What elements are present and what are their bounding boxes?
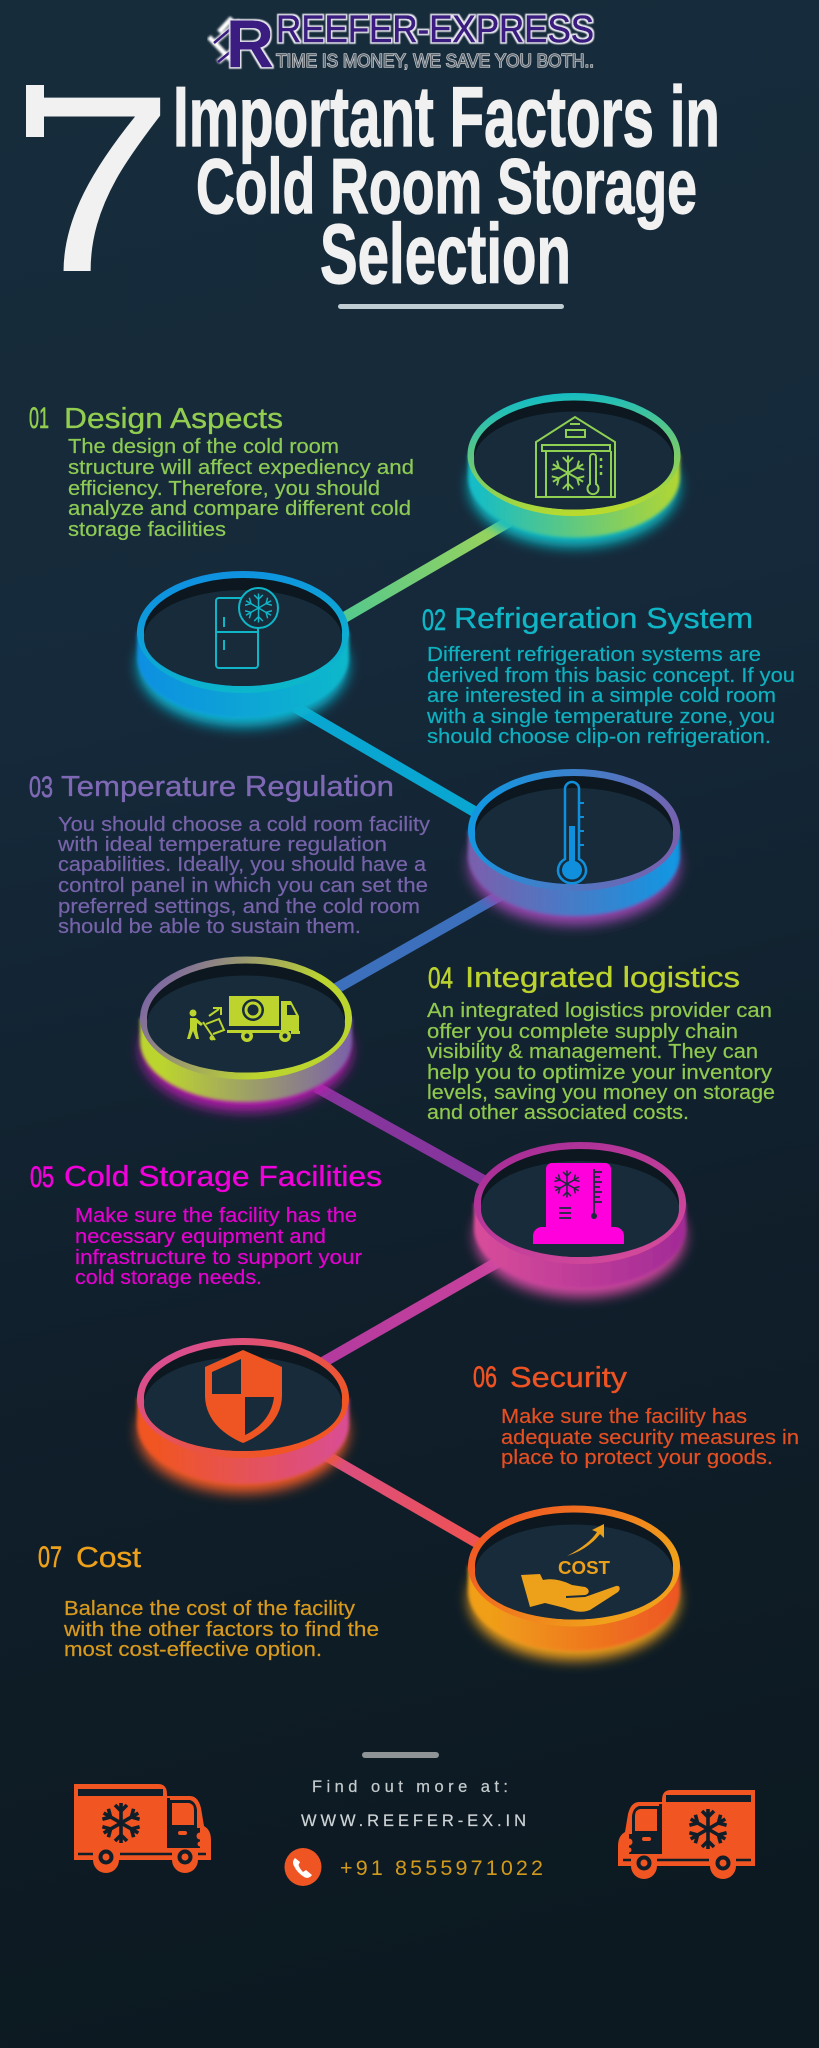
footer truck right <box>618 1790 755 1879</box>
title text <box>173 70 720 301</box>
icon: fridge <box>216 588 278 668</box>
body 02: Different refrigeration systems are <box>427 644 761 666</box>
body 04: and other associated costs. <box>427 1102 689 1124</box>
heading 01: 01 <box>29 402 49 435</box>
icon: cost hand: COST <box>558 1558 610 1578</box>
body 03: capabilities. Ideally, you should have a <box>58 854 427 876</box>
connector: 5 to 6 <box>320 1259 503 1364</box>
heading 05: Cold Storage Facilities <box>64 1161 382 1193</box>
body 01: analyze and compare different cold <box>68 498 411 520</box>
body 06: adequate security measures in <box>501 1427 799 1449</box>
body 07 <box>63 1598 379 1661</box>
body 01: storage facilities <box>68 519 226 541</box>
title <box>11 44 720 325</box>
icon: delivery truck with hand cart <box>187 996 300 1042</box>
body 03: control panel in which you can set the <box>58 875 428 897</box>
body 04: An integrated logistics provider can <box>427 1000 772 1022</box>
factor 01 text <box>29 402 414 541</box>
icon: cost hand <box>521 1524 620 1612</box>
body 03: with ideal temperature regulation <box>57 834 387 856</box>
heading 02: 02 <box>422 604 446 637</box>
body 03: preferred settings, and the cold room <box>58 896 420 918</box>
title text: Selection <box>320 207 571 301</box>
body 04: help you to optimize your inventory <box>427 1062 772 1084</box>
body 02: should choose clip-on refrigeration. <box>427 726 771 748</box>
disk 3: temperature regulation <box>468 769 680 925</box>
factor 02 text <box>422 603 795 748</box>
find out more text: Find out more at: <box>312 1778 508 1796</box>
body 02 <box>426 644 795 748</box>
body 05: necessary equipment and <box>75 1226 326 1248</box>
factor 07 text <box>38 1541 379 1661</box>
body 03: You should choose a cold room facility <box>58 814 430 836</box>
disk 4: integrated logistics <box>140 956 352 1111</box>
body 06: place to protect your goods. <box>501 1447 773 1469</box>
factor 03 text <box>29 771 430 938</box>
body 04: offer you complete supply chain <box>427 1021 738 1043</box>
connector: 1 to 2 <box>340 521 510 620</box>
heading 06: Security <box>510 1362 628 1394</box>
heading 03: Temperature Regulation <box>61 771 394 803</box>
heading 07: Cost <box>76 1542 141 1574</box>
heading 06 <box>473 1361 628 1394</box>
body 07: with the other factors to find the <box>63 1619 379 1641</box>
body 03: should be able to sustain them. <box>58 916 361 938</box>
body 01: efficiency. Therefore, you should <box>68 478 380 500</box>
logo tagline: TIME IS MONEY, WE SAVE YOU BOTH.. <box>276 51 594 71</box>
connector: 3 to 4 <box>330 892 506 992</box>
body 06: Make sure the facility has <box>501 1406 747 1428</box>
phone number: +91 8555971022 <box>340 1856 543 1880</box>
website: WWW.REEFER-EX.IN <box>301 1812 526 1830</box>
body 02: with a single temperature zone, you <box>426 706 775 728</box>
heading 03: 03 <box>29 771 53 804</box>
body 07: Balance the cost of the facility <box>64 1598 355 1620</box>
heading 01: Design Aspects <box>64 403 283 435</box>
heading 07: 07 <box>38 1541 62 1574</box>
heading 07 <box>38 1541 141 1574</box>
factor 06 text <box>473 1361 799 1469</box>
disk 7: cost <box>468 1506 680 1660</box>
icon: phone <box>284 1848 322 1886</box>
heading 02: Refrigeration System <box>454 603 753 635</box>
logo wordmark: REEFER-EXPRESS <box>276 9 594 51</box>
disk 1: design aspects <box>468 393 680 547</box>
body 01: The design of the cold room <box>68 436 339 458</box>
heading 05: 05 <box>30 1161 54 1194</box>
body 03 <box>57 814 430 938</box>
body 05: infrastructure to support your <box>75 1247 362 1269</box>
heading 04: Integrated logistics <box>465 962 740 994</box>
heading 04: 04 <box>428 962 453 995</box>
body 06 <box>501 1406 799 1469</box>
big numeral 7: 7 <box>11 44 175 325</box>
heading 06: 06 <box>473 1361 497 1394</box>
body 02: derived from this basic concept. If you <box>427 665 795 687</box>
footer truck left <box>74 1784 211 1873</box>
body 04: levels, saving you money on storage <box>427 1082 775 1104</box>
body 04 <box>427 1000 775 1124</box>
icon: storage unit with thermometer <box>533 1163 624 1244</box>
body 01 <box>68 436 414 541</box>
icon: shield <box>205 1350 282 1443</box>
connector: 6 to 7 <box>320 1452 488 1549</box>
body 05: cold storage needs. <box>75 1267 262 1289</box>
body 07: most cost-effective option. <box>64 1639 322 1661</box>
connector: 4 to 5 <box>316 1087 490 1184</box>
body 02: are interested in a simple cold room <box>427 685 776 707</box>
disk 2: refrigeration system <box>137 571 349 727</box>
logo: Reefer-Express <box>209 6 594 82</box>
icon: cold room <box>536 417 615 497</box>
body 04: visibility & management. They can <box>427 1041 758 1063</box>
body 05: Make sure the facility has the <box>75 1205 357 1227</box>
connector: 2 to 3 <box>295 707 482 816</box>
disk 5: cold storage facilities <box>474 1142 686 1297</box>
logo mark: R <box>226 6 274 82</box>
factor 05 text <box>30 1161 382 1289</box>
footer contact <box>284 1778 543 1886</box>
body 05 <box>75 1205 362 1289</box>
factor 04 text <box>427 962 775 1124</box>
body 01: structure will affect expediency and <box>68 457 414 479</box>
disk 6: security <box>137 1338 349 1493</box>
icon: thermometer <box>558 782 586 883</box>
